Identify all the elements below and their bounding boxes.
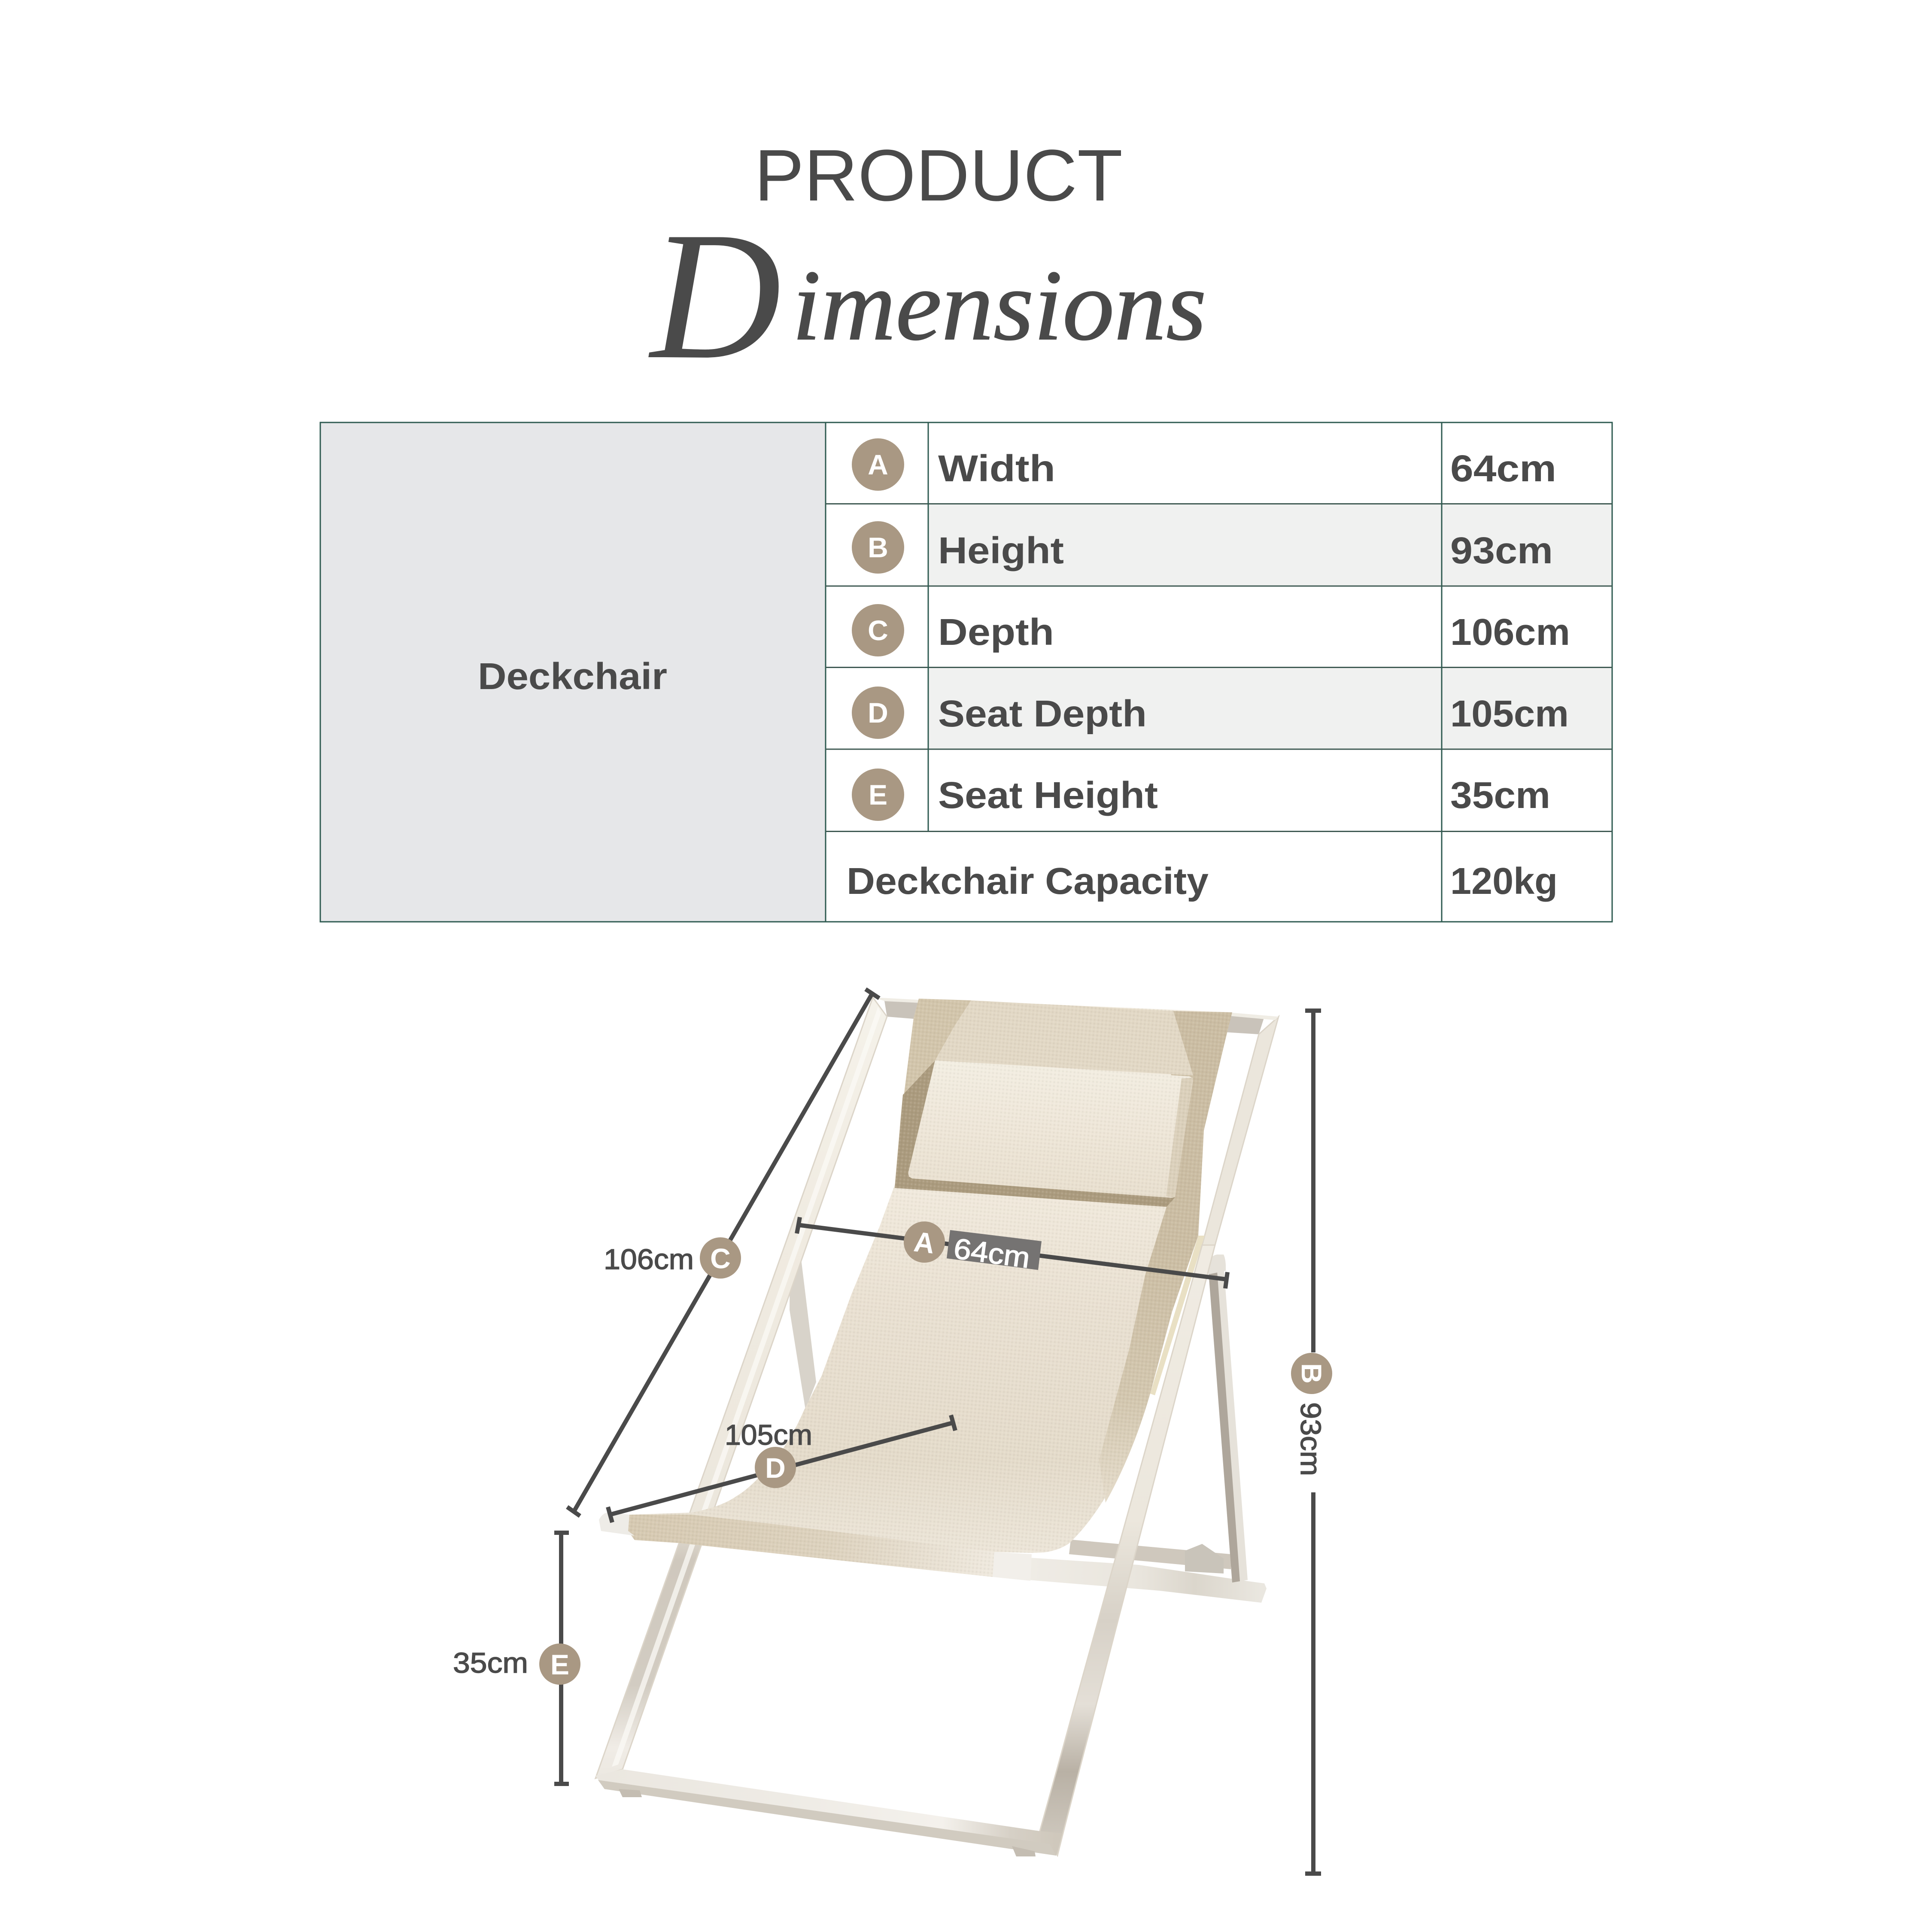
row: Seat Height: Seat Height	[938, 775, 1158, 816]
dimension C: depth	[567, 989, 879, 1516]
rear support: left	[790, 1245, 816, 1410]
pillow side face	[1166, 1078, 1193, 1197]
title: Dimensions script: D	[647, 194, 781, 397]
row: Depth	[852, 604, 1570, 656]
dimension B: height: B	[1296, 1363, 1327, 1384]
row: Deckchair Capacity: Deckchair Capacity	[847, 860, 1209, 902]
row: Height: 93cm	[1450, 530, 1553, 571]
dimension D: seat depth: D	[765, 1452, 786, 1484]
dimension E: seat height: E	[550, 1649, 569, 1680]
row: Deckchair Capacity	[847, 860, 1558, 902]
row: Depth: 106cm	[1450, 611, 1570, 653]
wood strip behind fabric	[1150, 1236, 1205, 1395]
row: Seat Depth: D	[868, 697, 888, 729]
panel: Deckchair product cell	[320, 422, 826, 922]
row: Width: Width	[938, 448, 1055, 489]
dimensions table	[320, 422, 1612, 922]
row: Width: 64cm	[1450, 448, 1556, 489]
fabric: upper headrest panel	[899, 999, 971, 1130]
frame: bottom bar	[595, 1769, 1063, 1856]
dimension E: seat height: 35cm	[453, 1647, 528, 1679]
title: Dimensions script: imensions	[792, 249, 1206, 361]
dimension A: width: 64cm	[952, 1233, 1032, 1274]
row: Height	[852, 521, 1553, 574]
foot: left	[619, 1789, 642, 1797]
row: Width	[852, 438, 1556, 491]
row: Seat Depth	[852, 687, 1569, 739]
dimension B: height: 93cm	[1294, 1402, 1327, 1476]
row: Height: B	[868, 532, 888, 563]
rear tube and lower seat bar	[1028, 1540, 1267, 1603]
rear support: right	[1207, 1255, 1248, 1583]
dimension D: seat depth	[608, 1415, 955, 1522]
dimension A: width	[797, 1217, 1227, 1288]
dimension A: width: A	[912, 1225, 936, 1260]
pillow shadow	[895, 1060, 1175, 1207]
frame: top rims	[873, 997, 1279, 1020]
fabric: main sling	[628, 999, 1232, 1577]
foot: right	[1012, 1846, 1036, 1856]
dimension D: seat depth: 105cm	[725, 1419, 812, 1451]
row: Seat Depth: 105cm	[1450, 693, 1569, 735]
title: Dimensions script	[647, 194, 1206, 397]
panel: Deckchair product cell: Deckchair	[478, 656, 667, 697]
title: PRODUCT: PRODUCT	[754, 135, 1123, 216]
dimension B: height	[1291, 1011, 1332, 1874]
frame: top rods	[884, 1001, 1264, 1034]
frame: left rail	[595, 997, 887, 1778]
frame: right rail front	[1040, 1245, 1215, 1856]
row: Seat Height	[852, 769, 1550, 821]
dimension C: depth: 106cm	[604, 1243, 694, 1276]
row: Height: Height	[938, 530, 1064, 571]
deckchair illustration	[595, 997, 1279, 1856]
headrest flap	[935, 1000, 1193, 1075]
frame: right rail back	[1202, 1017, 1279, 1245]
dimension C: depth: C	[710, 1242, 731, 1274]
row: Seat Height: 35cm	[1450, 775, 1550, 816]
fabric weave texture	[628, 999, 1232, 1577]
row: Seat Depth: Seat Depth	[938, 693, 1147, 735]
row: Width: A	[868, 449, 888, 480]
row: Depth: Depth	[938, 611, 1054, 653]
dimension E: seat height	[453, 1533, 580, 1784]
row: Seat Height: E	[869, 779, 887, 811]
pillow	[908, 1060, 1193, 1198]
fabric: front roll	[628, 1515, 994, 1577]
seat front bar end caps	[599, 1512, 1032, 1581]
table grid and row shading	[826, 422, 1612, 922]
row: Depth: C	[868, 614, 888, 646]
fabric: darker right edge strip	[1099, 1011, 1232, 1503]
row: Deckchair Capacity: 120kg	[1450, 860, 1558, 902]
